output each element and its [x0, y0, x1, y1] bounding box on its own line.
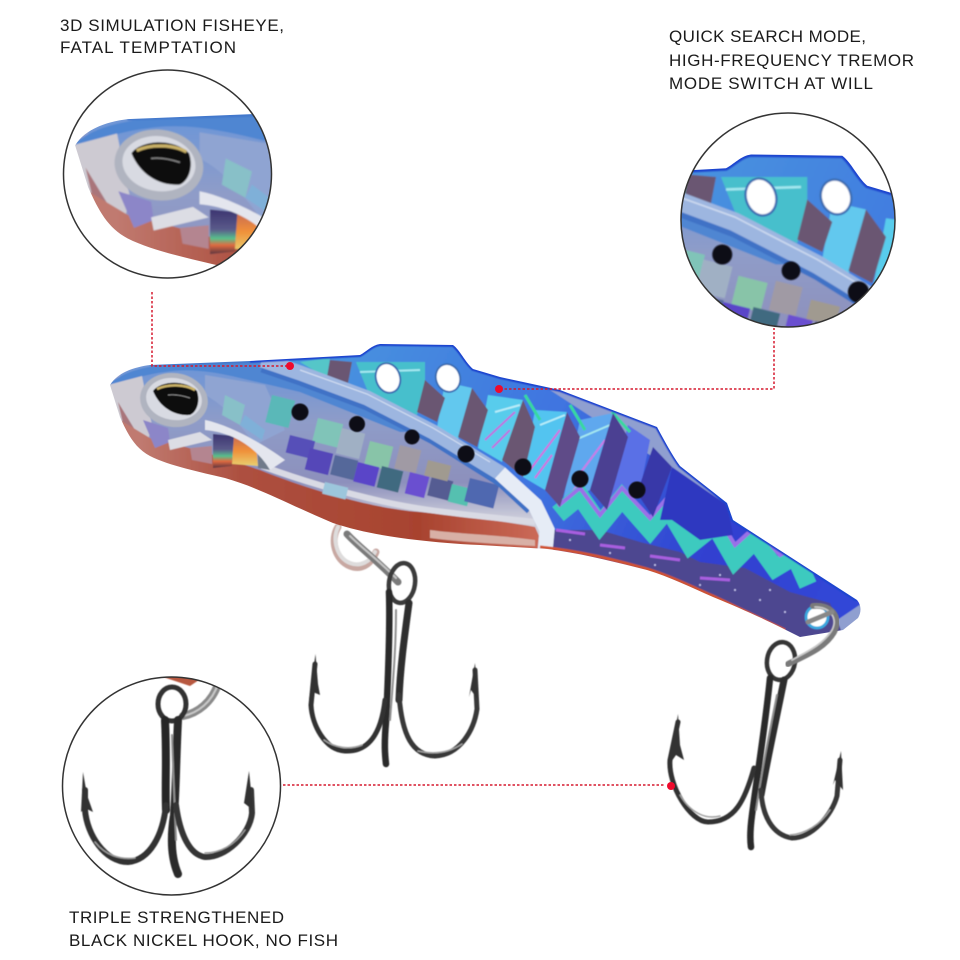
- lower dark speckled band: [550, 530, 845, 640]
- underside red edge: [540, 547, 785, 630]
- rear treble hook with ring: [669, 640, 843, 847]
- silver nose: [108, 376, 152, 452]
- zoom circle: fisheye: [62, 69, 272, 279]
- silver flank: [120, 360, 547, 545]
- tail ring and hole: [788, 606, 837, 664]
- top edge: [250, 344, 857, 600]
- heading: hook feature: [69, 908, 338, 950]
- heading: search mode feature: MODE SWITCH AT WILL: [669, 74, 873, 93]
- checker mosaic on flank: [265, 395, 499, 509]
- heading: fisheye feature: FATAL TEMPTATION: [60, 38, 236, 57]
- heading: search mode feature: HIGH-FREQUENCY TREMOR: [669, 51, 914, 70]
- speckles: [569, 539, 786, 613]
- body holes: [372, 360, 464, 396]
- blue head crown: [105, 358, 433, 432]
- callout line: hook: [283, 782, 675, 790]
- fisheye: [137, 369, 211, 431]
- heading: fisheye feature: 3D SIMULATION FISHEYE,: [60, 16, 284, 35]
- callout line: body: [495, 328, 774, 393]
- black side dots: [292, 404, 646, 498]
- zoom circle: treble hook: [62, 676, 280, 895]
- back half holographic base: [262, 338, 870, 645]
- heading: search mode feature: [669, 27, 914, 93]
- front treble hook with ring: [309, 527, 478, 764]
- heading: fisheye feature: [60, 16, 284, 57]
- belly: [120, 420, 548, 556]
- callout line: fisheye: [152, 292, 294, 370]
- silver streak above belly: [262, 466, 535, 522]
- zigzag holographic band: [558, 496, 808, 585]
- lure body: [100, 335, 870, 645]
- heading: search mode feature: QUICK SEARCH MODE,: [669, 27, 866, 46]
- dark diagonal stripes: [327, 360, 672, 517]
- heading: hook feature: BLACK NICKEL HOOK, NO FISH: [69, 931, 338, 950]
- light holographic panels: [300, 358, 650, 508]
- lateral line: [262, 368, 530, 510]
- dark blue tail panel: [660, 467, 733, 540]
- iridescent herringbone lines: [360, 370, 630, 495]
- zoom circle: body and holes: [680, 112, 896, 328]
- heading: hook feature: TRIPLE STRENGTHENED: [69, 908, 284, 927]
- head holographic panels: [143, 395, 285, 470]
